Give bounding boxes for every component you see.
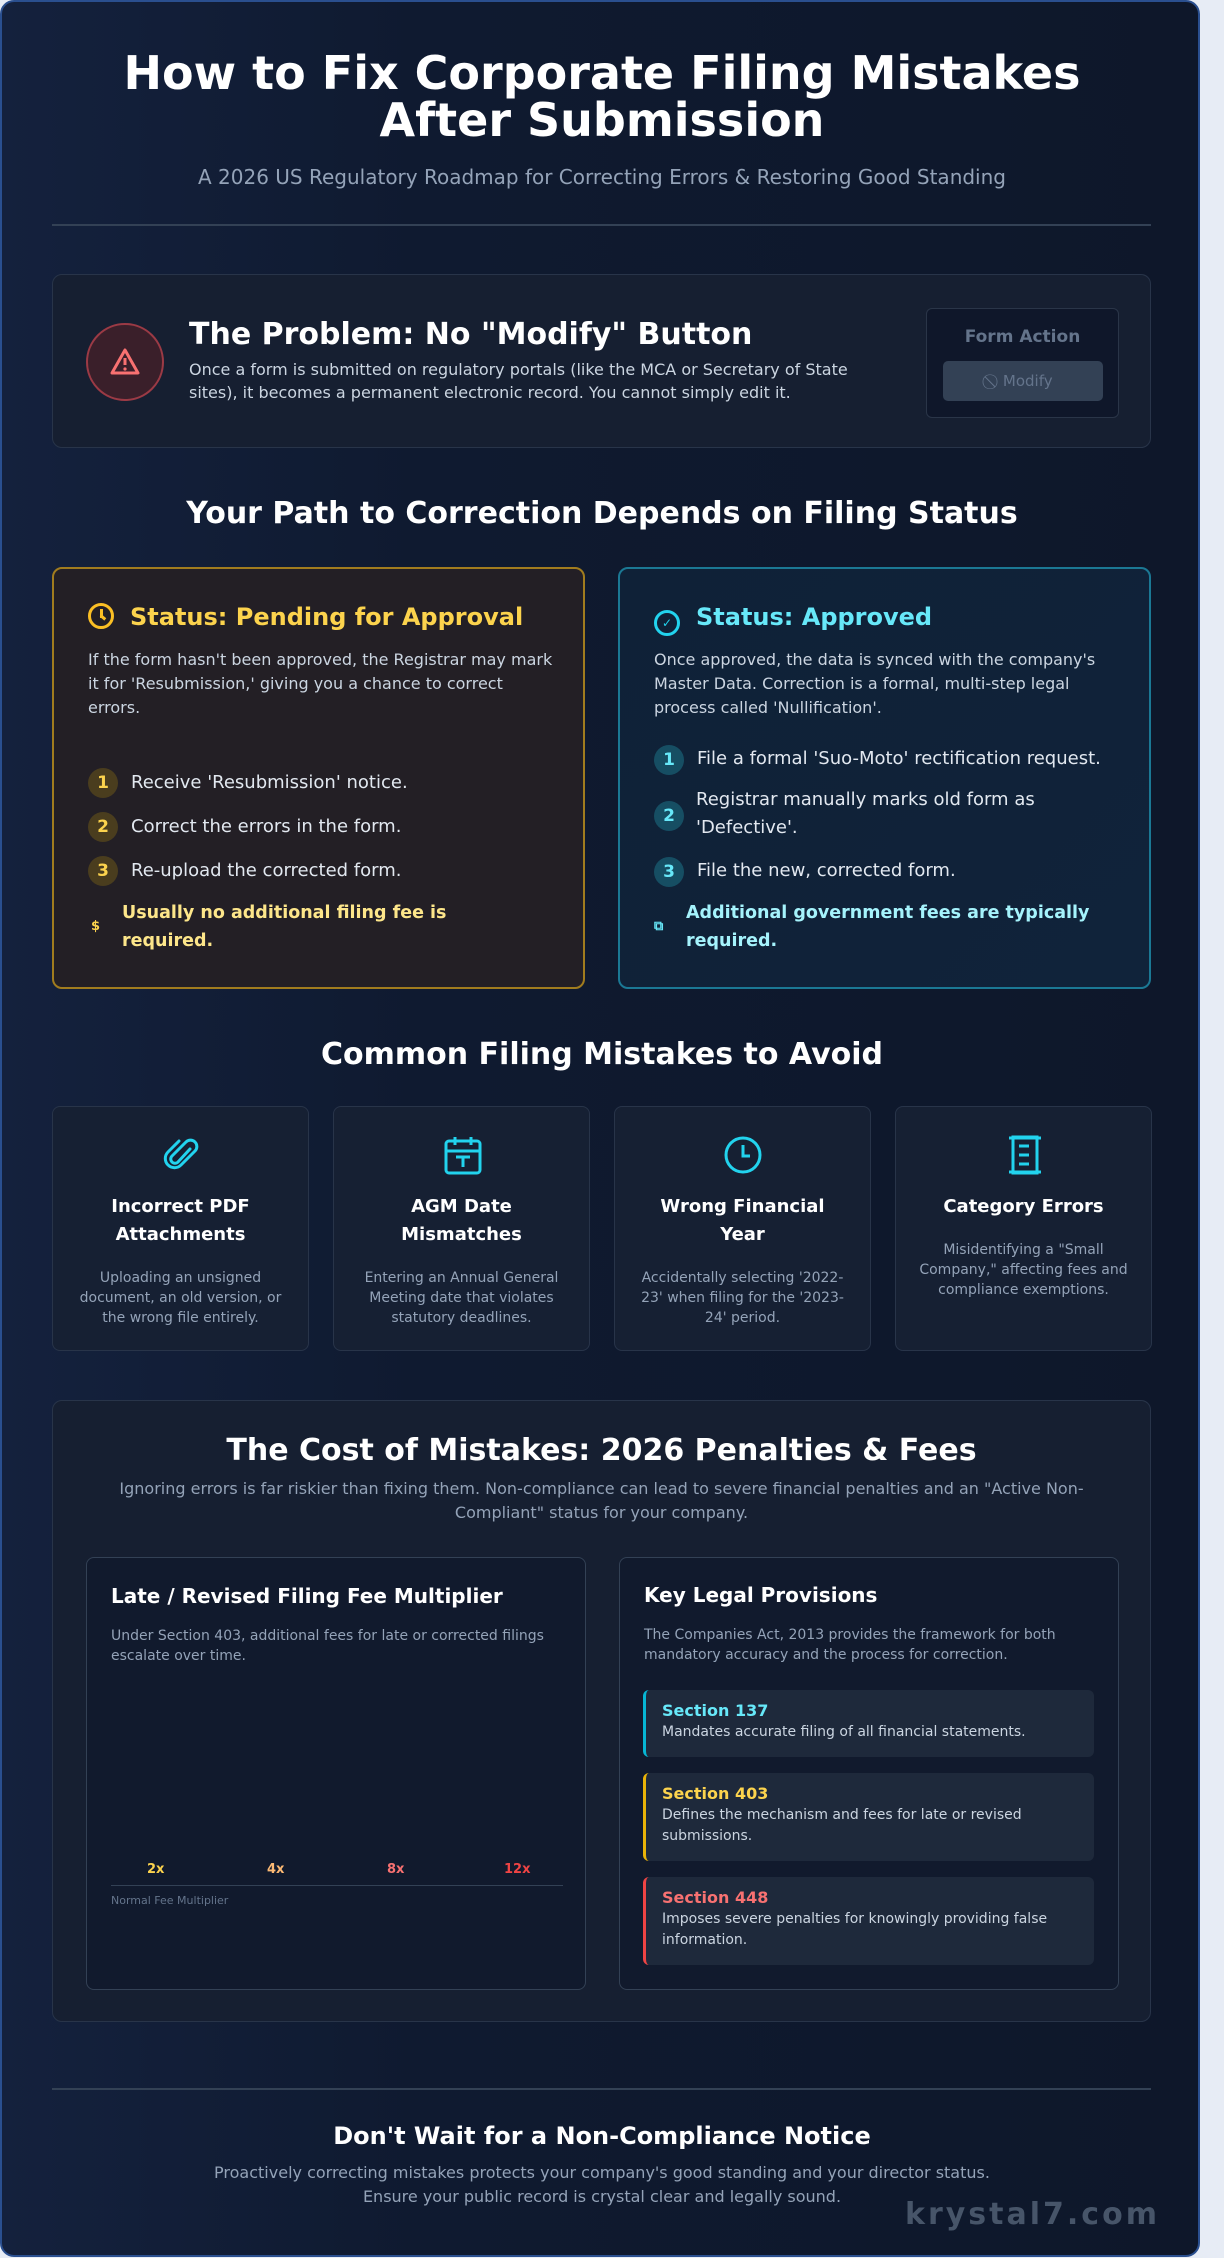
section 137: Mandates accurate filing of all financial statements. bbox=[662, 1724, 1026, 1740]
form action mockup: ⃠ Modify bbox=[993, 372, 1053, 390]
icon: warning bbox=[86, 323, 164, 401]
problem text: Once a form is submitted on regulatory portals (like the MCA or Secretary of State sites), it becomes a permanent electronic record. You cannot simply edit it. bbox=[189, 360, 848, 402]
section 137 bbox=[643, 1690, 1094, 1757]
chart labels: 12x bbox=[504, 1862, 530, 1877]
card: agm bbox=[333, 1106, 590, 1351]
approved steps: 1 bbox=[663, 750, 675, 770]
panel: cost of mistakes: The Companies Act, 2013 provides the framework for both mandatory accuracy and the process for correction. bbox=[644, 1627, 1056, 1663]
title bbox=[124, 46, 1080, 147]
icon: clock bbox=[724, 1136, 762, 1174]
footer heading: Don't Wait for a Non-Compliance Notice bbox=[333, 2122, 871, 2150]
footer text: Ensure your public record is crystal clear and legally sound. bbox=[363, 2187, 841, 2206]
legal provisions panel bbox=[619, 1557, 1119, 1990]
card: agm: Entering an Annual General Meeting date that violates statutory deadlines. bbox=[365, 1270, 558, 1326]
section 137: Section 137 bbox=[662, 1701, 768, 1720]
pending steps: 3 bbox=[97, 861, 109, 881]
approved steps: 3 bbox=[663, 862, 675, 882]
section 403 bbox=[643, 1773, 1094, 1861]
icon: paperclip bbox=[164, 1138, 198, 1170]
icon: scroll bbox=[1009, 1136, 1041, 1174]
heading: common mistakes: Common Filing Mistakes to Avoid bbox=[321, 1037, 883, 1072]
card: financial year: Year bbox=[720, 1224, 765, 1245]
subtitle: A 2026 US Regulatory Roadmap for Correcting Errors & Restoring Good Standing bbox=[198, 165, 1006, 189]
section 448: Section 448 bbox=[662, 1888, 768, 1907]
pending steps: 2 bbox=[97, 817, 109, 837]
card: financial year: Wrong Financial bbox=[660, 1196, 825, 1217]
chart labels: 8x bbox=[387, 1862, 404, 1877]
pending steps: Correct the errors in the form. bbox=[131, 816, 401, 837]
panel: cost of mistakes bbox=[52, 1400, 1151, 2022]
form action mockup: Form Action bbox=[965, 327, 1080, 347]
panel: problem bbox=[52, 274, 1151, 448]
chart panel: Normal Fee Multiplier bbox=[111, 1894, 228, 1907]
chart labels: 4x bbox=[267, 1862, 284, 1877]
heading: path to correction: Your Path to Correction Depends on Filing Status bbox=[186, 496, 1018, 531]
chart panel: Late / Revised Filing Fee Multiplier bbox=[111, 1584, 503, 1608]
pending steps bbox=[88, 768, 408, 886]
panel: pending bbox=[52, 567, 585, 989]
approved note: ⧉ bbox=[654, 919, 663, 934]
cost heading: The Cost of Mistakes: 2026 Penalties & Fees bbox=[226, 1433, 977, 1468]
cost text: Ignoring errors is far riskier than fixing them. Non-compliance can lead to severe financial penalties and an "Active Non-Compliant" status for your company. bbox=[119, 1479, 1084, 1522]
pending heading: Status: Pending for Approval bbox=[130, 603, 523, 631]
card: category: Misidentifying a "Small Company," affecting fees and compliance exemptions. bbox=[919, 1242, 1128, 1298]
section 403: Defines the mechanism and fees for late or revised submissions. bbox=[662, 1807, 1022, 1844]
pending steps: 1 bbox=[97, 773, 109, 793]
title: How to Fix Corporate Filing Mistakes bbox=[124, 46, 1080, 100]
approved steps: Registrar manually marks old form as 'Defective'. bbox=[696, 789, 1035, 838]
card: financial year: Accidentally selecting '2022-23' when filing for the '2023-24' period. bbox=[641, 1270, 844, 1326]
card: category: Category Errors bbox=[943, 1196, 1104, 1217]
pending steps: Receive 'Resubmission' notice. bbox=[131, 772, 408, 793]
pending note: $ bbox=[91, 919, 100, 934]
chart panel: Under Section 403, additional fees for late or corrected filings escalate over time. bbox=[111, 1628, 544, 1664]
approved heading: Status: Approved bbox=[696, 603, 932, 631]
chart panel bbox=[86, 1557, 586, 1990]
problem heading: The Problem: No "Modify" Button bbox=[189, 317, 752, 352]
card: pdf: Attachments bbox=[116, 1224, 245, 1245]
card: financial year bbox=[614, 1106, 871, 1351]
approved note: Additional government fees are typically required. bbox=[686, 903, 1089, 951]
pending note: Usually no additional filing fee is required. bbox=[122, 903, 446, 951]
panel: cost of mistakes: Key Legal Provisions bbox=[644, 1583, 877, 1607]
approved steps: File the new, corrected form. bbox=[697, 860, 956, 881]
section 448 bbox=[643, 1877, 1094, 1965]
card: agm: Mismatches bbox=[401, 1224, 522, 1245]
card: category bbox=[895, 1106, 1152, 1351]
pending text: If the form hasn't been approved, the Registrar may mark it for 'Resubmission,' giving you a chance to correct errors. bbox=[88, 650, 552, 717]
card: pdf: Uploading an unsigned document, an old version, or the wrong file entirely. bbox=[80, 1270, 281, 1326]
approved heading: ✓ bbox=[662, 616, 672, 630]
section 448: Imposes severe penalties for knowingly providing false information. bbox=[662, 1911, 1047, 1948]
form action mockup bbox=[926, 308, 1119, 418]
chart labels bbox=[111, 1862, 563, 1886]
panel: approved bbox=[618, 567, 1151, 989]
approved steps: File a formal 'Suo-Moto' rectification request. bbox=[697, 748, 1101, 769]
card: agm: AGM Date bbox=[411, 1196, 512, 1217]
title: After Submission bbox=[380, 93, 824, 147]
card: pdf: Incorrect PDF bbox=[111, 1196, 250, 1217]
chart labels: 2x bbox=[147, 1862, 164, 1877]
section 403: Section 403 bbox=[662, 1784, 768, 1803]
icon: calendar bbox=[444, 1137, 482, 1174]
footer text: Proactively correcting mistakes protects your company's good standing and your director status. bbox=[214, 2163, 990, 2182]
approved text: Once approved, the data is synced with the company's Master Data. Correction is a formal, multi-step legal process called 'Nullification'. bbox=[654, 650, 1095, 717]
approved steps bbox=[654, 745, 1101, 887]
pending steps: Re-upload the corrected form. bbox=[131, 860, 402, 881]
approved steps: 2 bbox=[663, 806, 675, 826]
watermark: krystal7.com bbox=[905, 2197, 1160, 2232]
card: pdf bbox=[52, 1106, 309, 1351]
footer text bbox=[214, 2163, 990, 2206]
